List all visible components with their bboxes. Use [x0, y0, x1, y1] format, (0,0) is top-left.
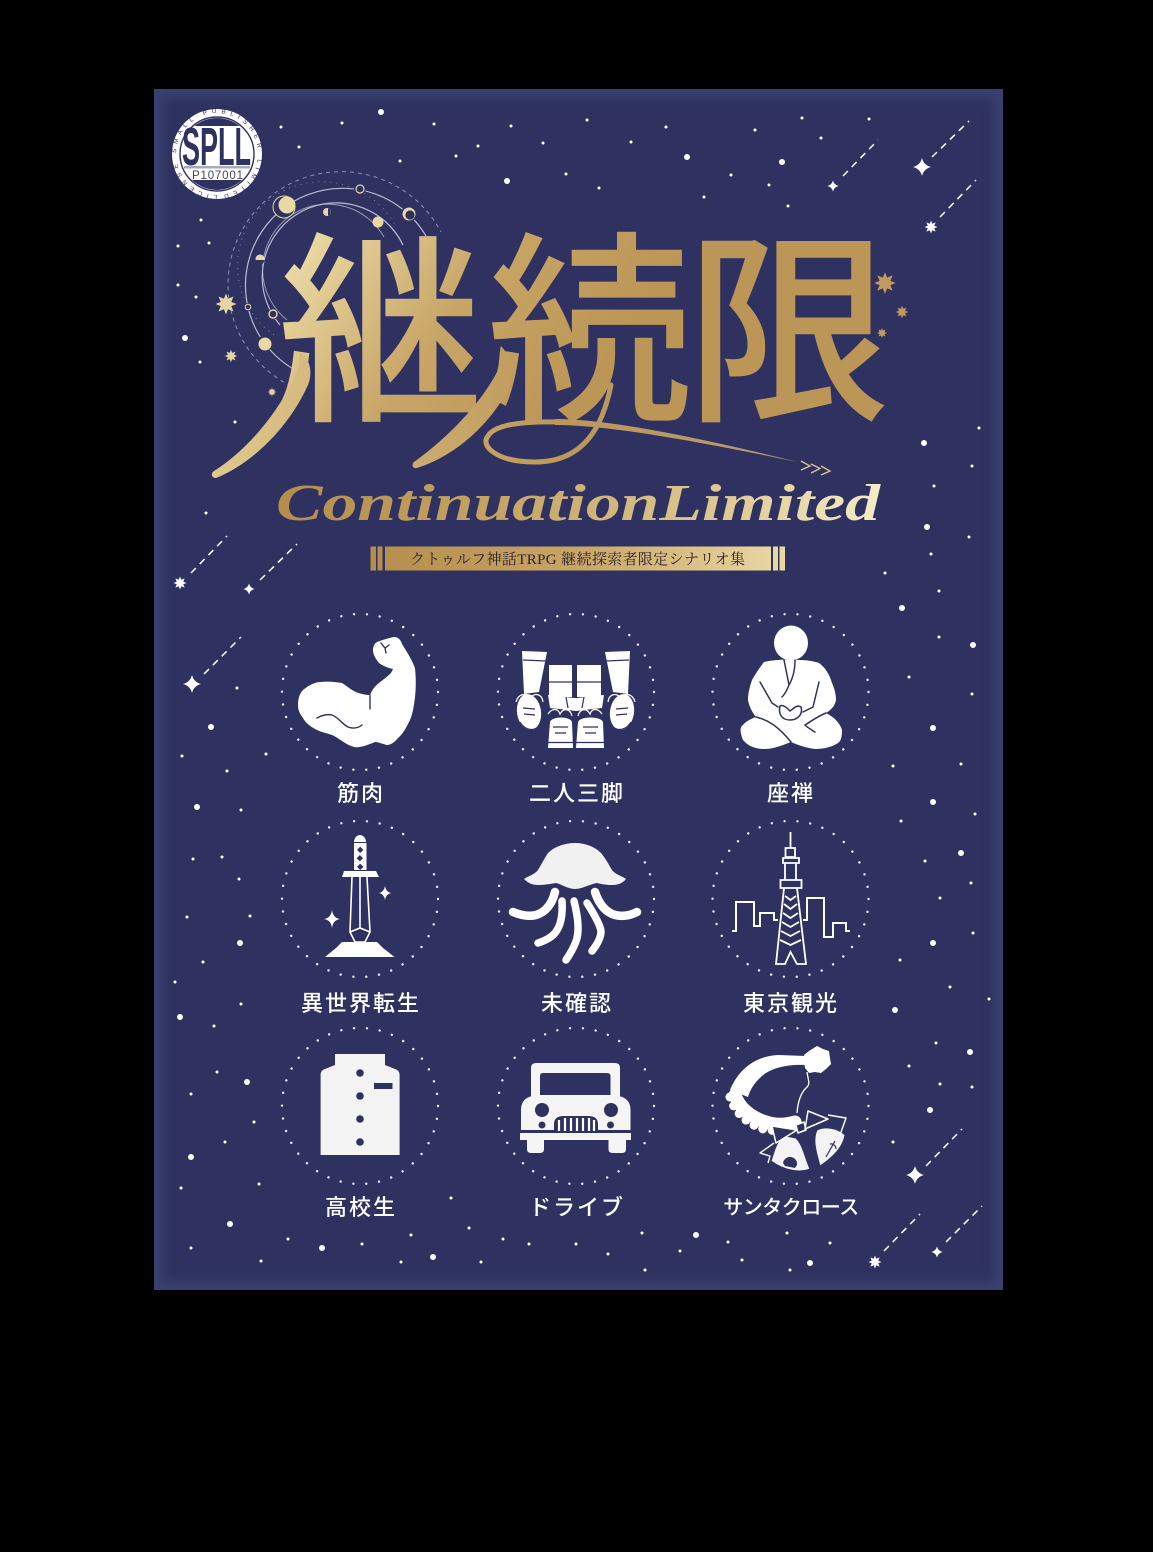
SPLL license badge: P107001: [192, 170, 243, 182]
poster artwork: [172, 109, 990, 1272]
icon: zazen meditation: [712, 614, 868, 806]
star field: [175, 112, 989, 1270]
title flourishes: [212, 346, 798, 478]
subtitle: Continuation Limited: ContinuationLimited: [276, 475, 881, 532]
arrow chevrons: [801, 461, 830, 475]
label: 高校生: [325, 1195, 397, 1220]
title: 継続限: 限: [686, 220, 891, 449]
gold stars: [216, 272, 908, 396]
title: 継続限: [212, 220, 891, 478]
cover background: [154, 89, 1003, 1290]
SPLL license badge: LICENSE SMALL PUBLISHER LIMITED: [172, 109, 262, 199]
label: 座禅: [767, 781, 815, 806]
planets: [244, 183, 417, 352]
label: 異世界転生: [301, 991, 421, 1016]
label: 東京観光: [743, 991, 839, 1016]
shooting stars: [174, 121, 982, 1268]
icon: jellyfish: [498, 821, 654, 1016]
SPLL license badge: SPLL: [182, 117, 251, 177]
label: 筋肉: [337, 781, 385, 806]
label: サンタクロース: [723, 1196, 859, 1219]
title: 継続限: 続: [487, 220, 692, 449]
icon: Tokyo Skytree: [712, 821, 868, 1016]
icon: muscle: [282, 614, 438, 806]
icon: school uniform: [282, 1028, 438, 1220]
gold tagline band: [370, 546, 785, 570]
label: 二人三脚: [529, 781, 625, 806]
label: ドライブ: [529, 1195, 625, 1220]
icon: santa hat and bells: [712, 1028, 868, 1219]
gold tagline band: クトゥルフ神話TRPG 継続探索者限定シナリオ集: [410, 550, 745, 568]
icon: jeep car: [498, 1028, 654, 1220]
label: 未確認: [541, 991, 613, 1016]
orbit diagram: [228, 172, 441, 386]
title: 継続限: 継: [278, 220, 483, 449]
icon: three-legged race: [498, 614, 654, 806]
icon: sword in stone: [282, 821, 438, 1016]
